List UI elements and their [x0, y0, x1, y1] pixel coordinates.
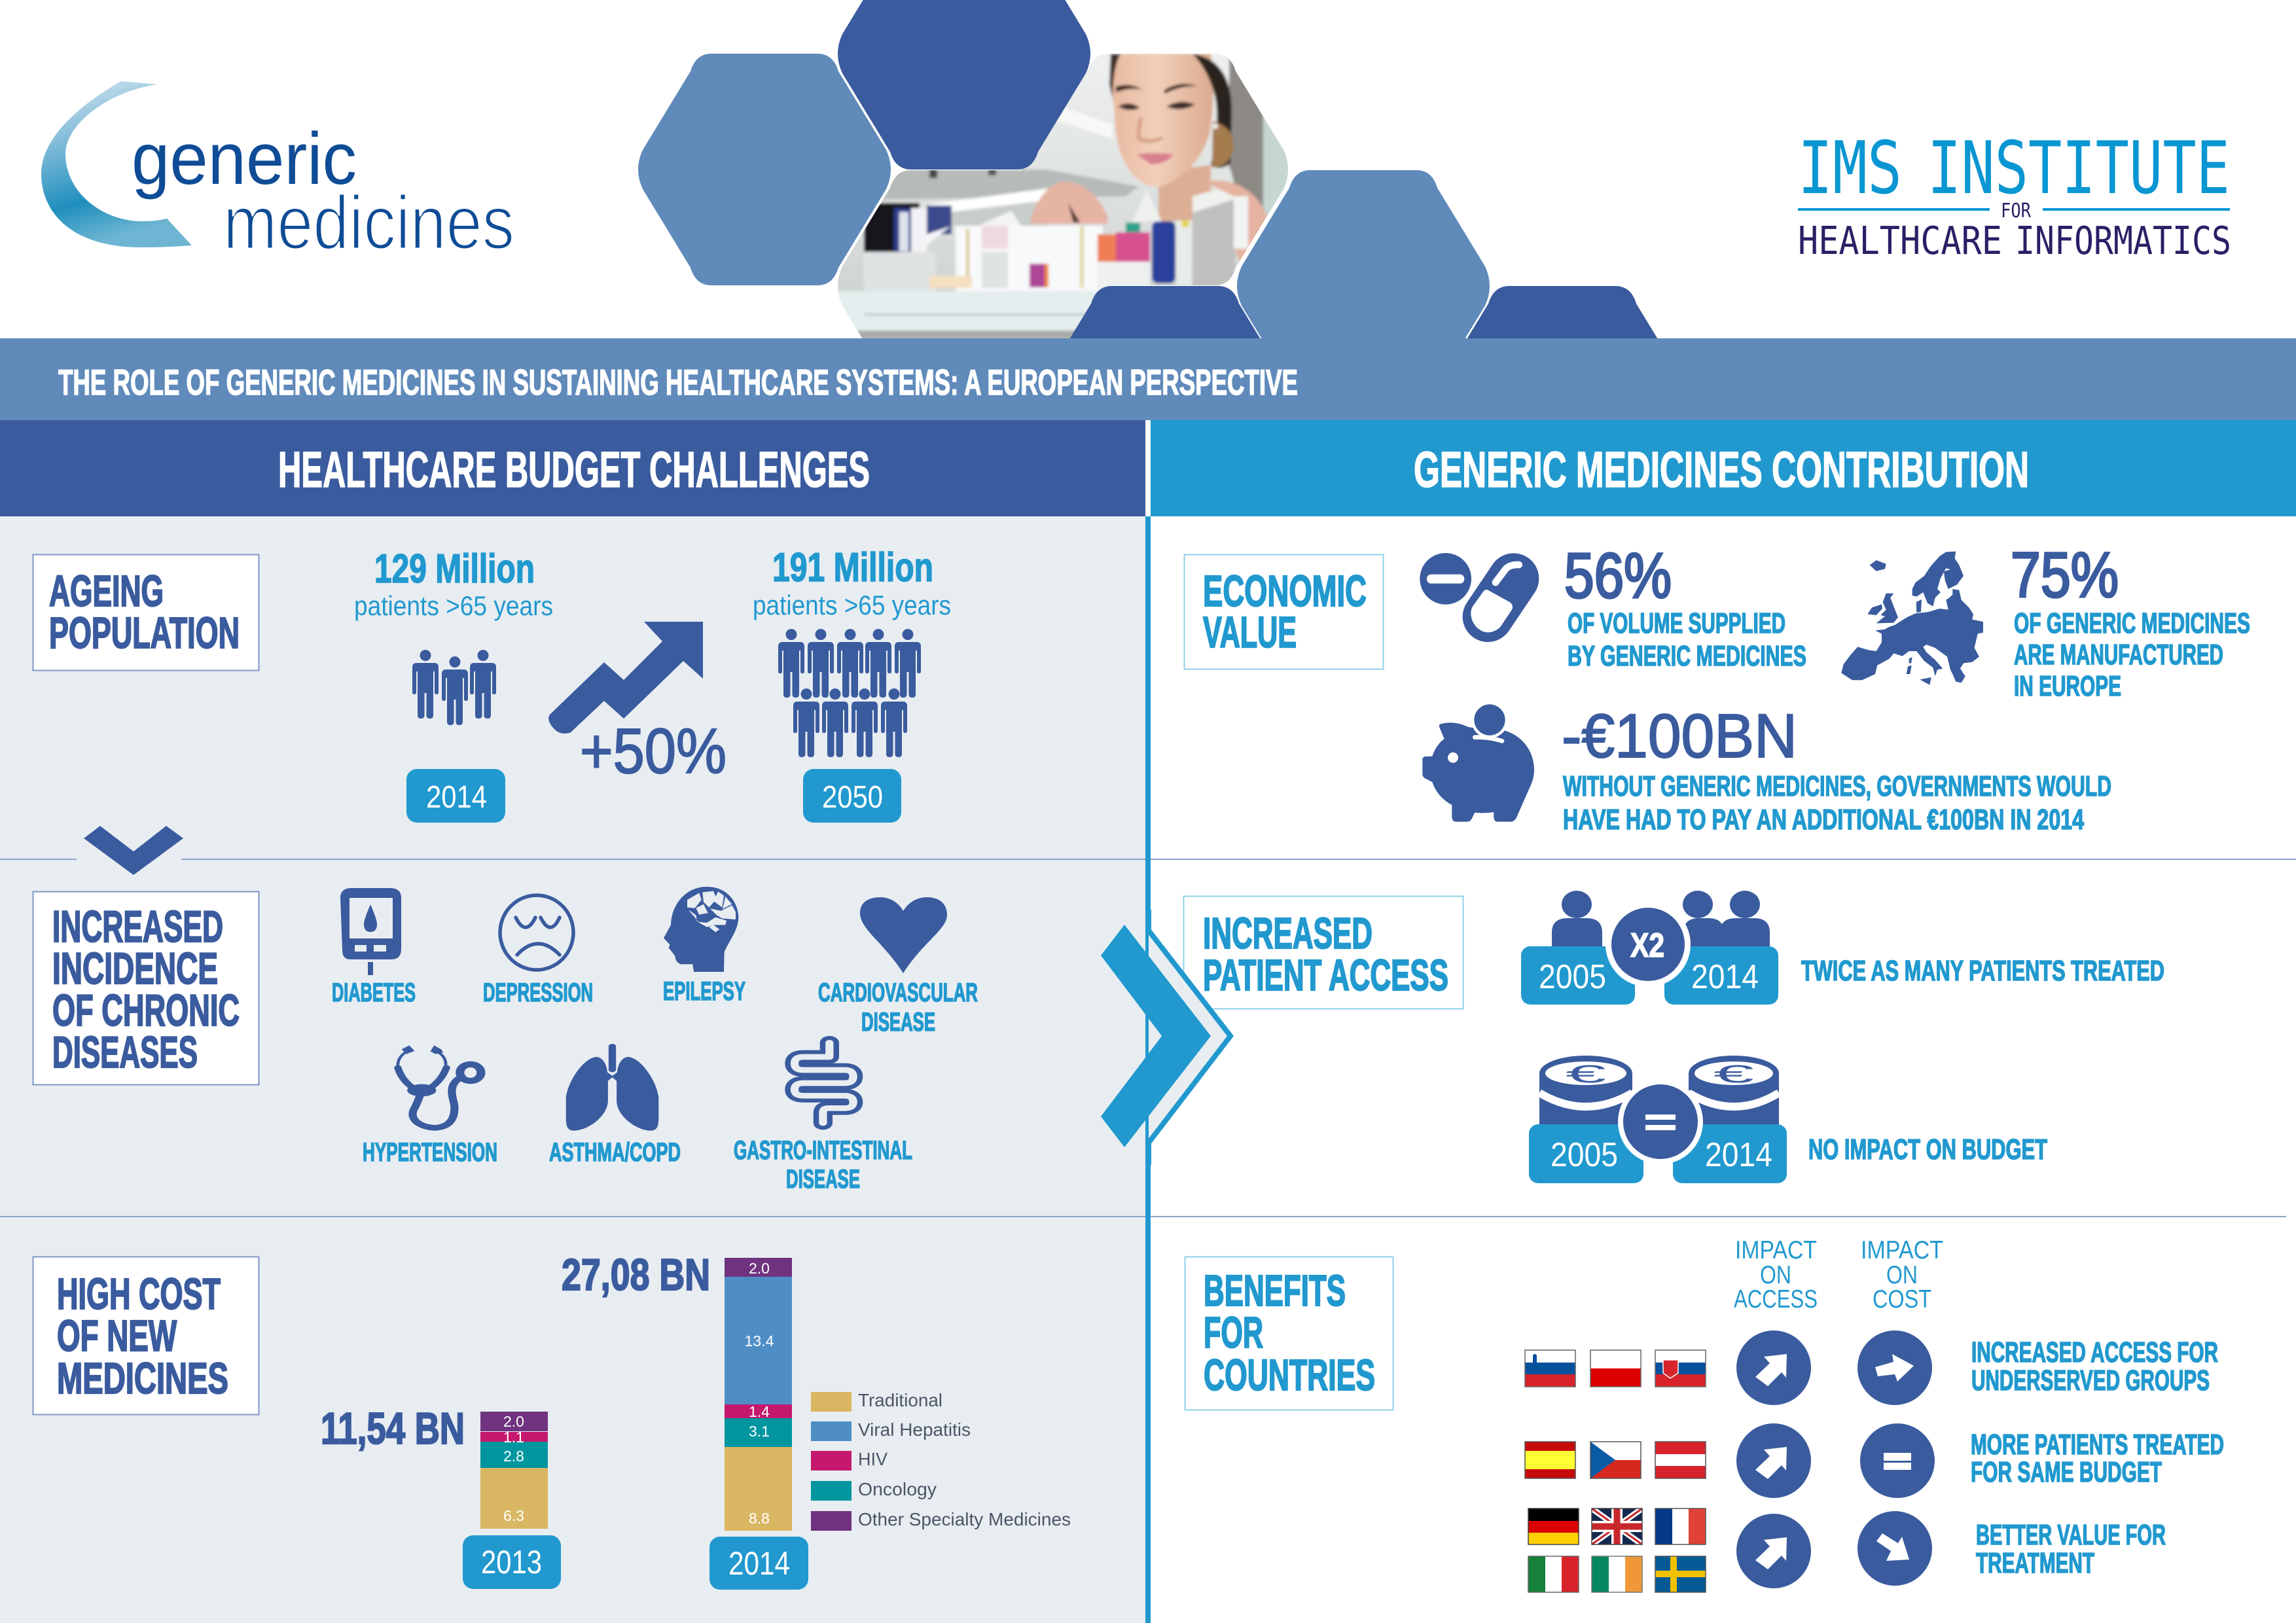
column label: impact on cost [1861, 1236, 1943, 1313]
bar chart: 2013: 2.0 [503, 1413, 524, 1430]
flag: poland [1590, 1350, 1641, 1387]
icon: lungs [566, 1044, 658, 1131]
text: better value: BETTER VALUE FOR [1976, 1519, 2166, 1551]
label: depression: DEPRESSION [483, 978, 593, 1007]
bar chart: 2014: 1.4 [749, 1403, 770, 1420]
text: no impact on budget: NO IMPACT ON BUDGET [1808, 1133, 2047, 1166]
heading box: OF NEW [57, 1311, 177, 1361]
total: 27,08 BN: 27,08 BN [562, 1250, 710, 1300]
icon: sad face [500, 895, 573, 970]
label: gastro-intestinal disease: GASTRO-INTESTINAL [734, 1136, 912, 1165]
icon: three people 2014 [412, 650, 496, 725]
logo rule left [1798, 208, 1990, 211]
stat: 129 million: patients >65 years [354, 590, 553, 621]
heading box: ECONOMIC [1203, 567, 1367, 616]
bar chart: 2013: 1.1 [503, 1429, 524, 1446]
icon: glucose meter [340, 888, 401, 975]
heading box: BENEFITS [1204, 1266, 1346, 1315]
title band [0, 338, 2296, 420]
legend: HIV [858, 1449, 888, 1469]
header: healthcare budget challenges: HEALTHCARE BUDGET CHALLENGES [278, 442, 870, 498]
bar chart: 2014 [725, 1258, 792, 1531]
text: volume supplied [1568, 607, 1806, 672]
text: without generic medicines: HAVE HAD TO PAY AN ADDITIONAL €100BN IN 2014 [1563, 804, 2084, 836]
heading box [33, 555, 259, 670]
label: cardiovascular disease [818, 978, 978, 1037]
text: volume supplied: BY GENERIC MEDICINES [1568, 640, 1806, 672]
icon: coins equal budget: € [1566, 1061, 1606, 1088]
decorative hexagons [638, 0, 1689, 518]
stat: 129 million [354, 546, 553, 621]
bar chart: 2014: 3.1 [749, 1423, 770, 1440]
flag: spain [1525, 1442, 1575, 1478]
flag: germany [1528, 1508, 1579, 1544]
hexagon bottom dark right [1436, 286, 1689, 518]
legend: Viral Hepatitis [858, 1419, 971, 1440]
logo word: generic: generic [132, 118, 357, 200]
logo word: for: FOR [2001, 200, 2032, 223]
logo word: medicines: medicines [223, 180, 514, 265]
column label: impact on cost: ON [1886, 1261, 1918, 1289]
badge: 2014 [406, 769, 505, 823]
heading box: MEDICINES [57, 1354, 228, 1403]
icon: coins equal budget: € [1713, 1061, 1754, 1088]
badge: 2014 chart: 2014 [728, 1545, 790, 1582]
logo line 1: IMS [1798, 126, 1902, 211]
badge: 2013: 2013 [481, 1544, 542, 1580]
text: manufactured in europe [2014, 607, 2250, 702]
icon: coins equal budget [1529, 1056, 1787, 1183]
column label: impact on cost: IMPACT [1861, 1236, 1943, 1264]
legend: Other Specialty Medicines [858, 1509, 1071, 1529]
text: better value: TREATMENT [1976, 1547, 2094, 1579]
column divider [1145, 516, 1151, 1623]
label: cardiovascular disease: CARDIOVASCULAR [818, 978, 978, 1007]
heading box: HIGH COST [57, 1270, 221, 1319]
panel: increased patient access [1183, 891, 2164, 1183]
stat: 191 million: patients >65 years [753, 590, 951, 620]
icon: piggy bank [1422, 702, 1534, 822]
heading box: PATIENT ACCESS [1203, 951, 1448, 1000]
label: diabetes: DIABETES [332, 978, 416, 1007]
icon: cost equal [1860, 1423, 1935, 1498]
logo: generic medicines [41, 81, 514, 265]
logo line 2: HEALTHCARE [1798, 218, 2002, 263]
badge: 2014 chart [709, 1537, 808, 1590]
column label: impact on access: ACCESS [1734, 1285, 1818, 1313]
flag: ireland [1592, 1556, 1642, 1592]
stat: +50%: +50% [580, 715, 726, 787]
text: manufactured in europe: IN EUROPE [2014, 670, 2121, 702]
logo rule right [2043, 208, 2230, 211]
icon: pill [1420, 553, 1519, 632]
icon: heart [860, 897, 947, 973]
bar chart: 2013 [480, 1412, 548, 1529]
total: 11,54 BN: 11,54 BN [321, 1404, 465, 1454]
icon: cost right [1857, 1330, 1932, 1405]
arrow: big chevron between columns [1101, 910, 1230, 1165]
header: generic medicines contribution [1151, 420, 2296, 516]
heading box: DISEASES [52, 1027, 198, 1077]
icon: stethoscope [398, 1045, 481, 1128]
photo: pharmacist at medicine shelf [831, 46, 1302, 347]
icon: patients x2: 2014 [1691, 958, 1759, 996]
icon: patients x2: X2 [1630, 927, 1664, 965]
heading box: POPULATION [49, 609, 240, 658]
text: without generic medicines [1563, 770, 2111, 836]
heading box [1185, 555, 1384, 669]
column label: impact on access [1734, 1236, 1818, 1313]
stat: 191 million [753, 545, 951, 620]
header: healthcare budget challenges [0, 420, 1145, 516]
flag: sweden [1655, 1556, 1706, 1592]
heading box: INCREASED [1203, 909, 1372, 958]
heading box: AGEING [49, 567, 164, 616]
heading box: INCREASED [52, 902, 223, 952]
label: gastro-intestinal disease [734, 1136, 912, 1194]
icon: head with brain [664, 887, 738, 972]
label: cardiovascular disease: DISEASE [861, 1008, 935, 1037]
lower page background [0, 338, 2296, 1623]
panel: benefits for countries [1185, 1236, 2224, 1592]
icon: patients x2: 2005 [1539, 958, 1606, 996]
stat: 56%: 56% [1564, 540, 1672, 611]
heading box: FOR [1204, 1308, 1263, 1357]
stat: 191 million: 191 Million [772, 545, 933, 590]
icon: chevron down [84, 826, 183, 875]
title: THE ROLE OF GENERIC MEDICINES IN SUSTAINING HEALTHCARE SYSTEMS: A EUROPEAN PERSPECTIVE [58, 362, 1298, 402]
flag: united kingdom [1592, 1508, 1642, 1544]
heading box: VALUE [1203, 608, 1297, 657]
panel: ageing population [33, 545, 951, 823]
legend [811, 1390, 1071, 1531]
logo line 2 second word: INFORMATICS [2015, 218, 2231, 263]
heading box [33, 1257, 259, 1415]
badge: 2014: 2014 [426, 780, 487, 815]
panel: high cost of new medicines [33, 1250, 1071, 1590]
heading box [1185, 1257, 1393, 1410]
icon: access up row 3 [1736, 1514, 1811, 1588]
column label: impact on access: IMPACT [1735, 1236, 1817, 1264]
icon: cost down [1857, 1511, 1932, 1586]
arrow: upward trend [548, 622, 703, 734]
flag: italy [1528, 1556, 1579, 1592]
icon: access up [1736, 1330, 1811, 1405]
icon: nine people 2050 [778, 629, 921, 757]
icon: access up row 2 [1736, 1423, 1811, 1498]
label: hypertension: HYPERTENSION [363, 1138, 497, 1167]
icon: intestine [795, 1043, 853, 1123]
icon: crescent [41, 81, 192, 247]
flag: slovenia [1525, 1350, 1575, 1387]
panel: chronic diseases [33, 887, 978, 1194]
logo: IMS Institute [1798, 126, 2231, 263]
badge: 2013 [463, 1535, 561, 1589]
flag: france [1655, 1508, 1706, 1544]
icon: patients x2 [1521, 891, 1778, 1005]
legend: Traditional [858, 1390, 942, 1410]
text: more patients [1971, 1429, 2224, 1488]
heading box: INCIDENCE [52, 944, 218, 993]
icon: coins equal budget: 2005 [1551, 1136, 1618, 1174]
stat: 129 million: 129 Million [374, 546, 535, 592]
icon: europe map [1841, 552, 1983, 685]
icon: coins equal budget: 2014 [1705, 1136, 1772, 1174]
hexagon bottom dark centre [1039, 286, 1291, 518]
hexagon top dark [838, 0, 1090, 169]
heading box [33, 891, 259, 1085]
stat: minus 100bn: -€100BN [1562, 702, 1797, 771]
bar chart: 2014: 13.4 [745, 1332, 774, 1349]
flag: czech republic [1590, 1442, 1641, 1478]
text: increased access [1971, 1336, 2218, 1397]
label: asthma copd: ASTHMA/COPD [549, 1138, 681, 1167]
hexagon right light [1237, 170, 1490, 402]
hexagon left [638, 54, 891, 285]
column label: impact on access: ON [1760, 1261, 1791, 1289]
flag: austria [1655, 1442, 1706, 1478]
text: better value [1976, 1519, 2166, 1579]
column label: impact on cost: COST [1873, 1285, 1931, 1313]
badge: 2050 [803, 769, 901, 823]
bar chart: 2013: 6.3 [503, 1507, 524, 1524]
panel: economic value [1185, 539, 2250, 836]
stat: 75%: 75% [2011, 539, 2119, 611]
panel: left background [0, 516, 1145, 1623]
heading box: OF CHRONIC [52, 986, 240, 1035]
label: gastro-intestinal disease: DISEASE [786, 1165, 860, 1194]
legend: Oncology [858, 1479, 937, 1499]
badge: 2050: 2050 [822, 780, 883, 815]
text: more patients: FOR SAME BUDGET [1971, 1456, 2162, 1488]
text: volume supplied: OF VOLUME SUPPLIED [1568, 607, 1785, 639]
bar chart: 2014: 2.0 [749, 1260, 770, 1277]
heading box: COUNTRIES [1204, 1351, 1375, 1400]
flag: slovakia [1655, 1350, 1706, 1387]
label: epilepsy: EPILEPSY [663, 977, 745, 1006]
heading box [1183, 897, 1463, 1009]
bar chart: 2014: 8.8 [749, 1510, 770, 1527]
bar chart: 2013: 2.8 [503, 1448, 524, 1465]
